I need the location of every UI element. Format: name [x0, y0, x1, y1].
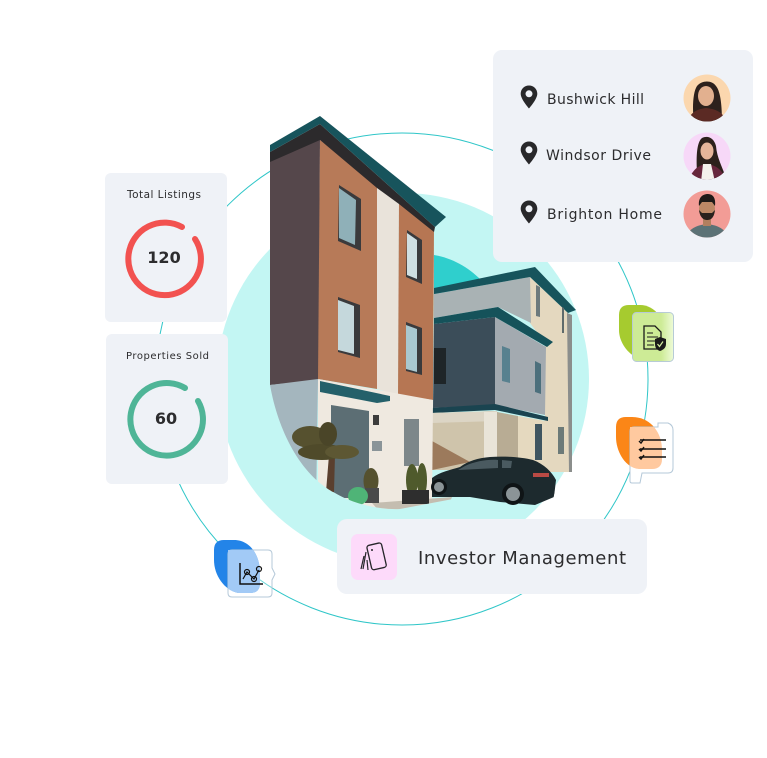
location: Windsor Drive: [521, 132, 730, 182]
panel: total listings: [105, 173, 227, 322]
panel: investor management: [337, 519, 647, 594]
location: Windsor Drive: Windsor Drive: [546, 148, 651, 164]
tower walls: [270, 116, 446, 510]
house photo: [270, 116, 576, 512]
tower windows: [338, 185, 422, 375]
ring chart: 60: 60: [155, 409, 177, 428]
ring chart: 60: [130, 383, 203, 456]
car: [431, 457, 556, 505]
icon: line chart: [214, 540, 275, 597]
properties sold label: Properties Sold: [126, 351, 209, 362]
orbit ring: [156, 133, 648, 625]
location: Bushwick Hill: Bushwick Hill: [547, 92, 644, 108]
infographic canvas: [105, 50, 753, 626]
palm and shrubs: [292, 422, 452, 512]
light teal circle: [217, 193, 589, 565]
icon: checklist: [616, 417, 673, 483]
right building: [432, 267, 576, 472]
total listings label: Total Listings: [126, 189, 201, 201]
ring chart: 120: 120: [147, 248, 181, 267]
panel: properties sold: [106, 334, 228, 484]
icon: cards: [351, 534, 397, 580]
investor management label: Investor Management: [418, 548, 626, 569]
canopy and door: [320, 381, 419, 498]
panel: locations: [493, 50, 753, 262]
location: Bushwick Hill: [521, 74, 730, 125]
dark teal accent: [434, 255, 481, 300]
location: Brighton Home: [521, 190, 730, 240]
location: Brighton Home: Brighton Home: [547, 207, 662, 223]
icon: document with shield: [619, 305, 674, 362]
ring chart: 120: [128, 223, 201, 295]
